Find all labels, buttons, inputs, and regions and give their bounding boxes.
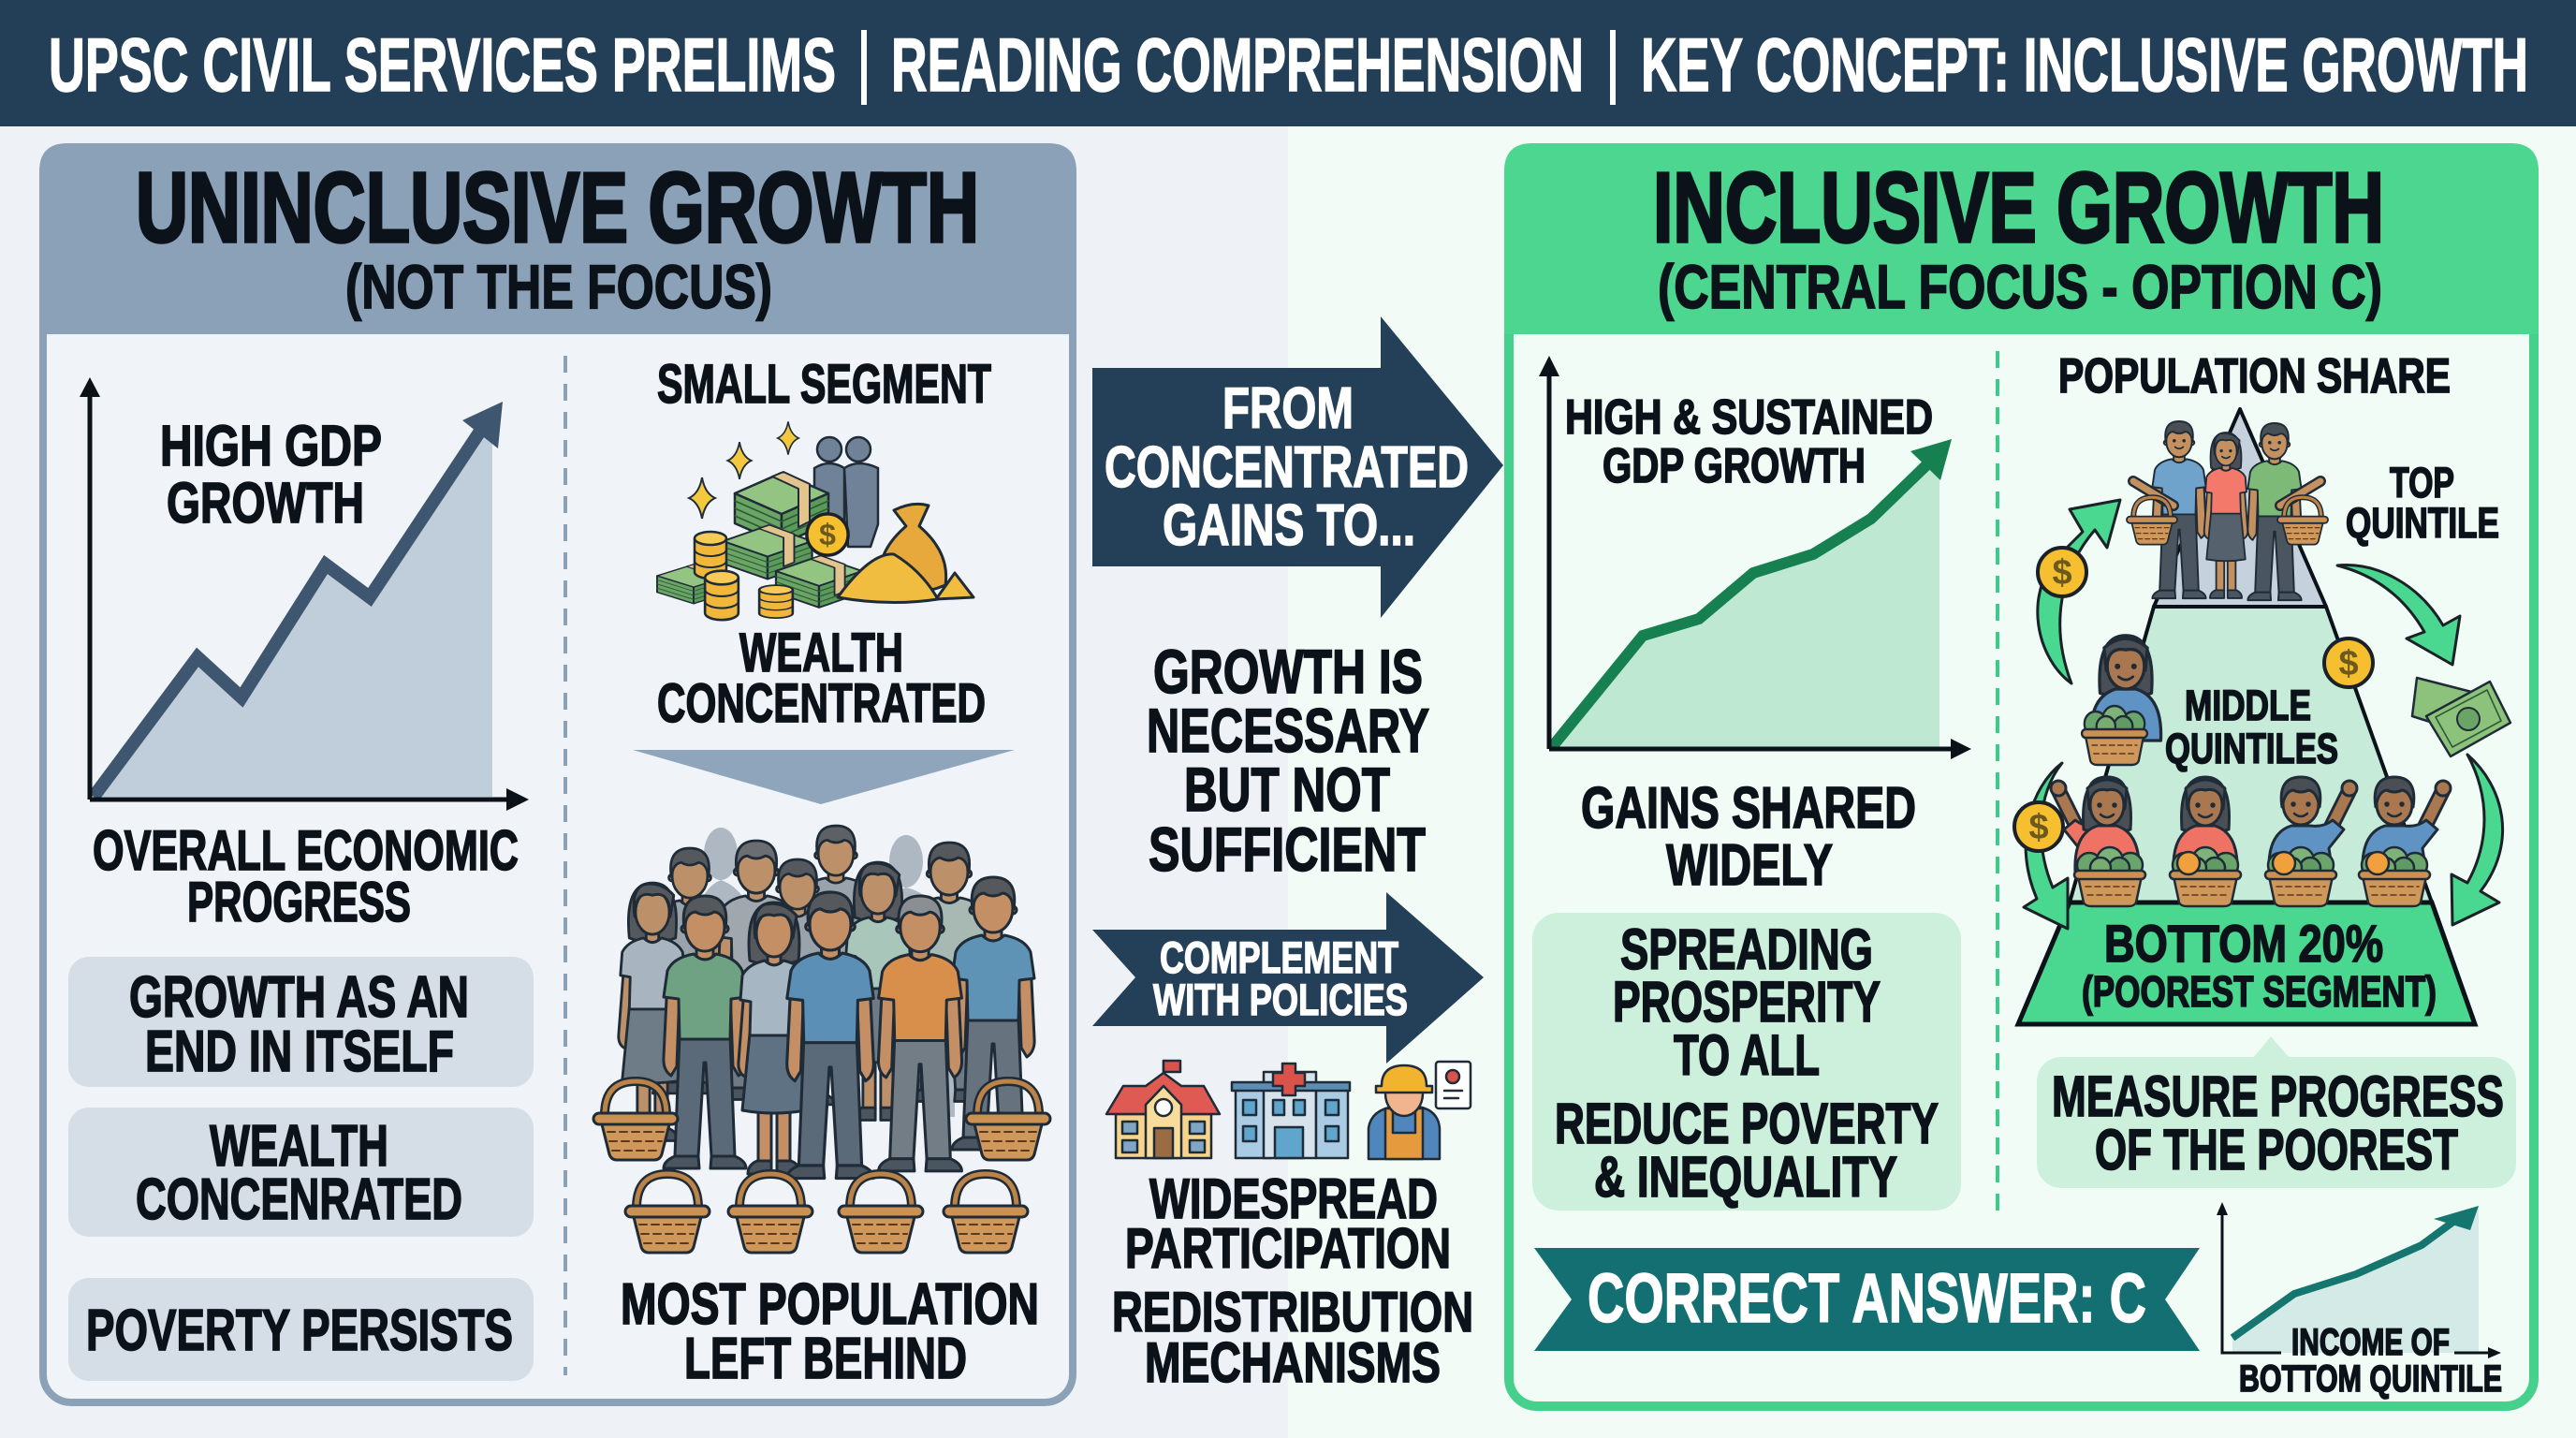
arrow: complement with policies: WITH POLICIES [1153, 975, 1408, 1024]
statement: growth is necessary but not sufficient [1147, 637, 1429, 884]
caption: redistribution mechanisms [1112, 1281, 1473, 1394]
caption: widespread participation: WIDESPREAD [1149, 1167, 1438, 1230]
box: growth as an end in itself: GROWTH AS AN [129, 965, 469, 1030]
caption: wealth concentrated: CONCENTRATED [657, 673, 986, 734]
arrow: from concentrated gains to: CONCENTRATED [1105, 435, 1469, 500]
heading: uninclusive growth: (NOT THE FOCUS) [345, 252, 772, 321]
panel: inclusive growth [1504, 143, 2539, 1406]
label: middle quintiles: QUINTILES [2165, 725, 2338, 772]
arrow: from concentrated gains to: FROM [1222, 376, 1354, 441]
caption: most population left behind: LEFT BEHIND [684, 1327, 967, 1391]
caption: overall economic progress [93, 819, 519, 933]
panel: uninclusive growth [39, 143, 1076, 1402]
icon: money pile with two people [657, 421, 973, 620]
caption: widespread participation [1125, 1167, 1451, 1280]
box: poverty persists [68, 1278, 534, 1381]
box: spreading prosperity [1532, 913, 1961, 1211]
icons: coins [2014, 548, 2373, 851]
heading: inclusive growth: (CENTRAL FOCUS - OPTION C) [1658, 252, 2382, 321]
callout: measure progress of the poorest [2037, 1036, 2516, 1188]
chart: high and sustained GDP growth [1539, 356, 1971, 759]
funnel arrow [633, 750, 1015, 804]
box: wealth concenrated: WEALTH [210, 1114, 388, 1179]
icon: worker [1368, 1062, 1471, 1159]
arrows: circular flow [2024, 500, 2503, 929]
statement: growth is necessary but not sufficient: BUT NOT [1184, 755, 1390, 824]
chart: high and sustained GDP growth: HIGH & SUSTAINED [1565, 390, 1933, 445]
statement: growth is necessary but not sufficient: GROWTH IS [1153, 637, 1423, 706]
box: growth as an end in itself [68, 957, 534, 1087]
title banner [0, 0, 2576, 126]
pyramid: middle quintiles [2070, 607, 2432, 902]
title banner: READING COMPREHENSION [891, 23, 1584, 108]
box: wealth concenrated: CONCENRATED [136, 1167, 462, 1232]
caption: most population left behind [621, 1272, 1039, 1391]
chart: high and sustained GDP growth: GDP GROWTH [1603, 439, 1866, 493]
box: spreading prosperity: SPREADING [1620, 917, 1873, 981]
people: top quintile [2127, 421, 2328, 600]
box: spreading prosperity: & INEQUALITY [1594, 1145, 1897, 1209]
title banner: UPSC CIVIL SERVICES PRELIMS [49, 23, 836, 108]
label: top quintile: QUINTILE [2346, 499, 2499, 547]
caption: overall economic progress: OVERALL ECONOMIC [93, 819, 519, 882]
arrow: complement with policies [1092, 892, 1484, 1064]
chart: income of bottom quintile: INCOME OF [2291, 1322, 2450, 1363]
label: bottom 20 percent: BOTTOM 20% [2104, 914, 2383, 973]
heading: uninclusive growth [136, 153, 979, 321]
statement: growth is necessary but not sufficient: NECESSARY [1147, 696, 1429, 765]
arrow: from concentrated gains to [1092, 316, 1503, 618]
label: bottom 20 percent: (POOREST SEGMENT) [2082, 967, 2437, 1016]
box: growth as an end in itself: END IN ITSELF [145, 1020, 454, 1084]
people: bottom quintile [2051, 777, 2451, 906]
icon: cash [2412, 678, 2510, 756]
illustration: crowd with empty baskets [593, 826, 1050, 1253]
caption: overall economic progress: PROGRESS [187, 871, 411, 933]
icon: school [1106, 1061, 1220, 1158]
label: middle quintiles [2165, 682, 2338, 772]
caption: redistribution mechanisms: MECHANISMS [1145, 1331, 1441, 1394]
chart: high GDP growth [80, 377, 529, 811]
diagram: income pyramid [2014, 409, 2510, 1024]
caption: gains shared widely: WIDELY [1666, 833, 1833, 898]
label: bottom 20 percent [2082, 914, 2437, 1016]
caption: gains shared widely: GAINS SHARED [1581, 776, 1916, 841]
banner: correct answer: CORRECT ANSWER: C [1588, 1259, 2146, 1337]
heading: uninclusive growth: UNINCLUSIVE GROWTH [136, 153, 979, 263]
label: middle quintiles: MIDDLE [2185, 682, 2311, 729]
caption: most population left behind: MOST POPULATION [621, 1272, 1039, 1337]
box: spreading prosperity: PROSPERITY [1613, 970, 1881, 1034]
banner: correct answer [1534, 1248, 2200, 1351]
box: wealth concenrated [68, 1108, 534, 1237]
box: spreading prosperity: REDUCE POVERTY [1555, 1092, 1939, 1155]
caption: gains shared widely [1581, 776, 1916, 898]
icon: hospital [1232, 1064, 1350, 1158]
chart: income of bottom quintile [2217, 1202, 2502, 1400]
caption: wealth concentrated [657, 623, 986, 734]
chart: high GDP growth: GROWTH [167, 471, 364, 535]
caption: widespread participation: PARTICIPATION [1125, 1217, 1451, 1280]
box: poverty persists: POVERTY PERSISTS [86, 1299, 513, 1363]
label: population share: POPULATION SHARE [2058, 349, 2451, 404]
label: top quintile [2346, 459, 2499, 547]
label: top quintile: TOP [2390, 459, 2454, 506]
person: middle quintile [2082, 636, 2161, 765]
label: small segment: SMALL SEGMENT [657, 354, 991, 415]
statement: growth is necessary but not sufficient: SUFFICIENT [1149, 814, 1426, 884]
caption: wealth concentrated: WEALTH [739, 623, 903, 683]
caption: redistribution mechanisms: REDISTRIBUTION [1112, 1281, 1473, 1343]
chart: high GDP growth: HIGH GDP [160, 414, 382, 477]
pyramid: bottom 20 percent [2018, 902, 2475, 1024]
pyramid: top quintile [2154, 409, 2326, 607]
heading: inclusive growth [1653, 153, 2384, 321]
arrow: from concentrated gains to: GAINS TO... [1163, 493, 1415, 558]
chart: income of bottom quintile: BOTTOM QUINTILE [2239, 1358, 2502, 1400]
box: spreading prosperity: TO ALL [1674, 1023, 1820, 1087]
arrow: complement with policies: COMPLEMENT [1160, 932, 1398, 982]
